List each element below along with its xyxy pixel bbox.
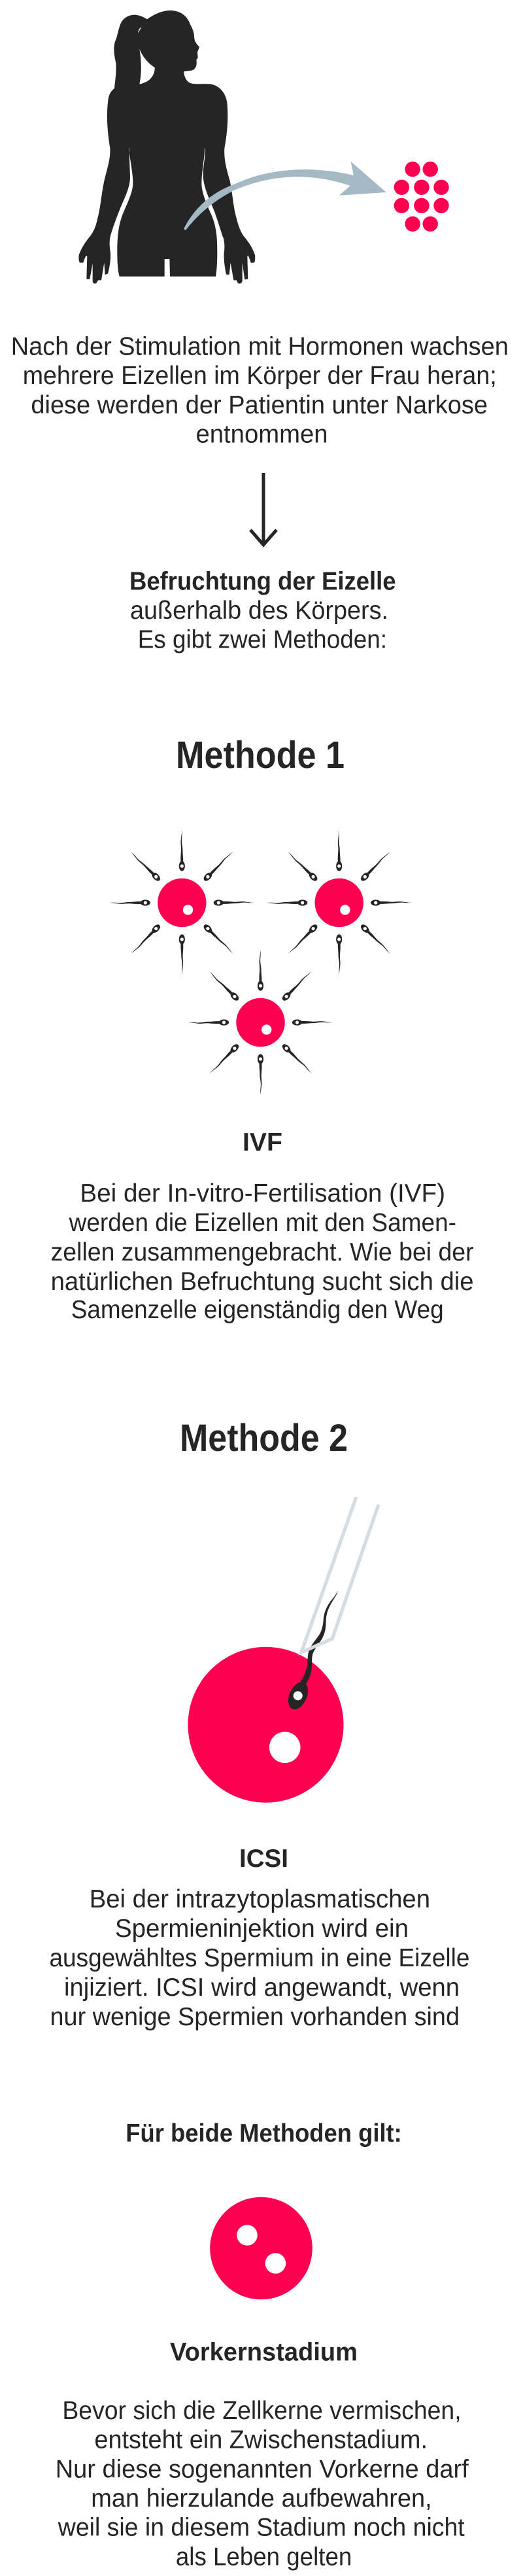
text: fertilisation intro (129, 568, 396, 654)
text: pronuclear description: weil sie in diesem Stadium noch nicht (58, 2514, 465, 2542)
text: ICSI description: Spermieninjektion wird ein (115, 1915, 409, 1943)
sperm being injected (284, 1590, 338, 1713)
egg cell (188, 1647, 344, 1803)
text: IVF description (51, 1179, 474, 1324)
text: hormone stimulation: mehrere Eizellen im Körper der Frau heran; (23, 362, 497, 390)
text: ICSI description: injiziert. ICSI wird angewandt, wenn (64, 1974, 460, 2002)
text: ICSI description: Bei der intrazytoplasmatischen (90, 1885, 430, 1913)
text: hormone stimulation: diese werden der Patientin unter Narkose (31, 391, 488, 419)
text: hormone stimulation: Nach der Stimulation mit Hormonen wachsen (11, 332, 509, 361)
text: hormone stimulation: entnommen (196, 420, 328, 448)
text: pronuclear description (56, 2397, 469, 2571)
egg with sperm: bottom (188, 950, 333, 1095)
illustration: ICSI injection (188, 1497, 379, 1803)
text: fertilisation intro: außerhalb des Körpers. (130, 597, 388, 625)
heading: Methode 2: Methode 2 (180, 1417, 348, 1459)
text: ICSI description: ausgewähltes Spermium in eine Eizelle (50, 1944, 469, 1972)
text: IVF description: zellen zusammengebracht. Wie bei der (51, 1238, 474, 1266)
label: IVF: IVF (243, 1128, 282, 1157)
illustration: IVF eggs with sperm (109, 830, 412, 1095)
egg with sperm: right (267, 830, 412, 975)
arrow: down (250, 473, 277, 545)
text: ICSI description (50, 1885, 469, 2031)
text: IVF description: Bei der In-vitro-Fertilisation (IVF) (80, 1179, 445, 1208)
text: IVF description: natürlichen Befruchtung sucht sich die (51, 1268, 474, 1296)
text: fertilisation intro: Es gibt zwei Methoden: (138, 626, 387, 654)
text: pronuclear description: entsteht ein Zwischenstadium. (94, 2426, 428, 2454)
icon: pronuclear stage egg (210, 2197, 312, 2299)
heading: both methods: Für beide Methoden gilt: (126, 2119, 402, 2148)
text: pronuclear description: Bevor sich die Zellkerne vermischen, (62, 2397, 462, 2425)
text: hormone stimulation (11, 332, 509, 448)
pipette (301, 1497, 379, 1652)
text: pronuclear description: man hierzulande aufbewahren, (91, 2484, 432, 2513)
icon: cluster of egg cells (394, 162, 449, 232)
egg with sperm: left (109, 830, 254, 975)
text: IVF description: werden die Eizellen mit den Samen- (69, 1209, 456, 1237)
label: ICSI: ICSI (239, 1845, 288, 1873)
heading: Methode 1: Methode 1 (176, 734, 345, 776)
arrow: from body to egg cells (184, 162, 386, 230)
text: IVF description: Samenzelle eigenständig den Weg (71, 1296, 444, 1324)
text: ICSI description: nur wenige Spermien vorhanden sind (50, 2003, 460, 2031)
illustration: female silhouette (78, 10, 255, 284)
label: Vorkernstadium: Vorkernstadium (170, 2338, 358, 2367)
text: pronuclear description: als Leben gelten (176, 2543, 352, 2571)
text: fertilisation intro: Befruchtung der Eizelle (129, 568, 396, 595)
text: pronuclear description: Nur diese sogenannten Vorkerne darf (56, 2455, 469, 2483)
